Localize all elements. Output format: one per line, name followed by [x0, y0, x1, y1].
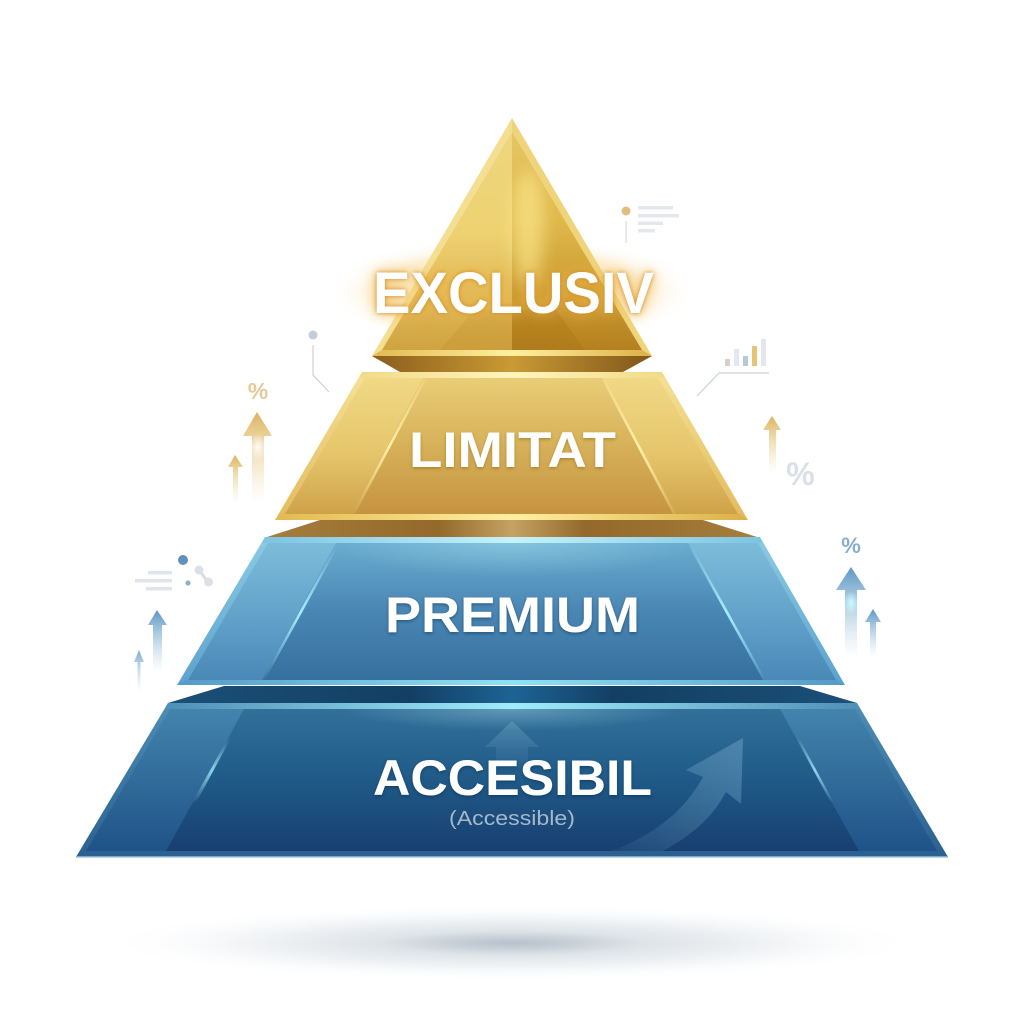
right side facet — [688, 543, 836, 680]
left glint — [352, 380, 426, 514]
left edge glint — [192, 738, 231, 803]
inner panel glow — [382, 543, 641, 568]
icon: node connector left — [308, 330, 329, 392]
inner panel — [166, 709, 859, 851]
ghost up arrow — [485, 721, 539, 770]
connector band under limitat — [267, 520, 757, 537]
top highlight — [165, 703, 860, 709]
icon: network dots and text lines left — [135, 555, 213, 590]
icon: right blue arrows and percent: % — [841, 533, 861, 558]
label: EXCLUSIV — [373, 261, 654, 326]
outer edge — [177, 537, 845, 685]
sublabel: (Accessible) — [449, 808, 575, 830]
tier: Premium — [177, 509, 845, 685]
icon: mini bar chart right — [697, 339, 769, 396]
label: PREMIUM — [385, 587, 640, 643]
under band — [372, 356, 652, 372]
right glint — [688, 545, 766, 680]
inner panel — [352, 378, 673, 514]
bottom highlight — [275, 514, 748, 520]
label tight glow: EXCLUSIV — [373, 261, 654, 326]
inner panel glow — [372, 709, 651, 727]
left side facet — [285, 378, 423, 514]
base strip — [372, 350, 652, 356]
right face — [512, 132, 642, 350]
bottom edge — [76, 851, 948, 857]
right side facet — [780, 709, 937, 851]
small arrow — [228, 455, 243, 503]
bottom highlight — [177, 680, 845, 685]
halo behind top tier label — [328, 236, 696, 348]
ghost curved arrow — [611, 738, 743, 851]
right face edge — [512, 118, 652, 356]
left glint — [262, 545, 339, 680]
lower left facet — [440, 310, 512, 350]
label: ACCESIBIL — [373, 750, 652, 806]
large arrow — [243, 412, 272, 503]
connector band under premium — [168, 686, 857, 703]
label glow: EXCLUSIV — [373, 261, 654, 326]
percent: % — [248, 378, 268, 404]
central glow — [512, 170, 544, 286]
left side facet — [86, 709, 244, 851]
inner panel — [262, 543, 763, 680]
left side facet — [188, 543, 336, 680]
outer edge — [76, 703, 948, 857]
tier: Exclusiv — [372, 118, 654, 372]
pyramid infographic — [76, 118, 948, 970]
lower right facet — [512, 310, 585, 350]
left face — [382, 132, 512, 350]
icon: right gold arrow and percent — [763, 416, 815, 492]
right glint — [602, 380, 676, 514]
top highlight — [262, 537, 763, 543]
ground shadow — [100, 905, 924, 981]
outer edge — [275, 372, 748, 520]
top highlight — [359, 372, 665, 378]
tier: Limitat — [275, 372, 748, 520]
right side facet — [602, 378, 738, 514]
icon: text note top right — [622, 206, 679, 243]
icon: right blue arrows and percent — [836, 533, 881, 657]
icon: left blue arrows — [134, 610, 167, 692]
icon: left gold arrows and percent — [228, 378, 272, 503]
tier: Accesibil — [76, 686, 948, 858]
label: LIMITAT — [409, 422, 616, 478]
right edge glint — [796, 738, 834, 803]
icon: right gold arrow and percent: % — [786, 456, 815, 492]
left face edge — [372, 118, 512, 356]
